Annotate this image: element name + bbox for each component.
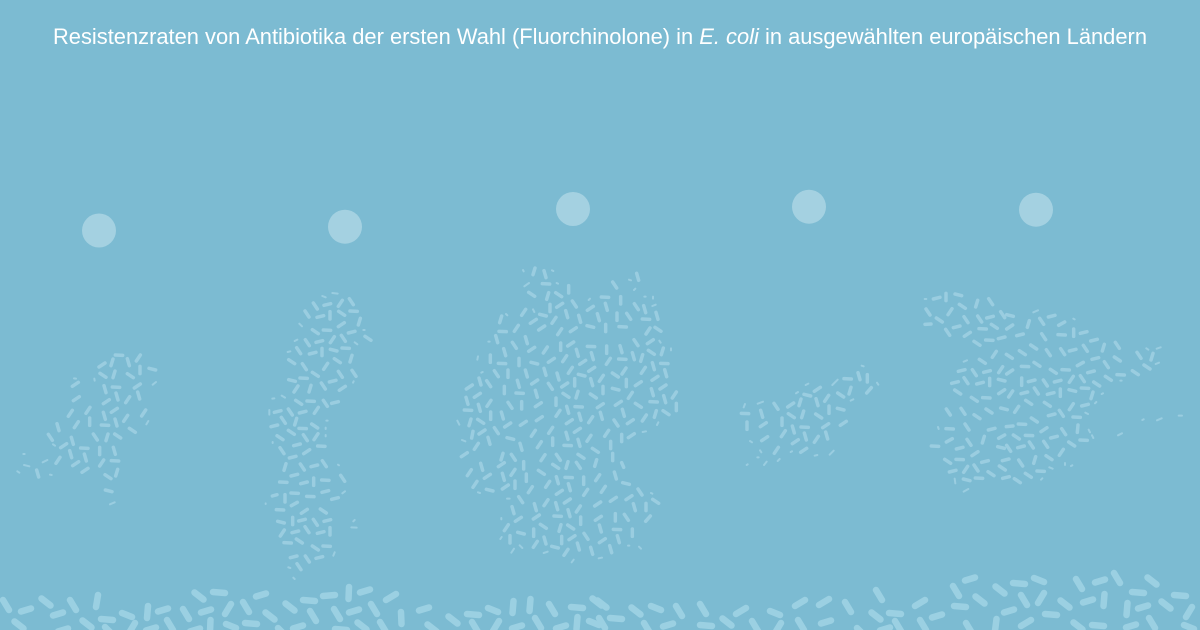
map: country 1 made of bacteria bbox=[17, 355, 156, 504]
map: Germany made of bacteria bbox=[457, 268, 676, 562]
map: country 2 made of bacteria bbox=[266, 293, 371, 579]
map: country 4 made of bacteria bbox=[741, 366, 878, 465]
map: country 5 made of bacteria bbox=[925, 293, 1182, 492]
circle: value marker 5 bbox=[1019, 193, 1053, 227]
title: Resistenzraten von Antibiotika der ersten Wahl (Fluorchinolone) in E. coli in ausgewählten europäischen Ländern bbox=[53, 24, 1147, 49]
circle: value marker 2 bbox=[328, 210, 362, 244]
bottom band of bacteria bbox=[3, 573, 1194, 630]
circle: value marker 4 bbox=[792, 190, 826, 224]
circle: value marker 1 bbox=[82, 214, 116, 248]
circle: value marker 3 bbox=[556, 192, 590, 226]
